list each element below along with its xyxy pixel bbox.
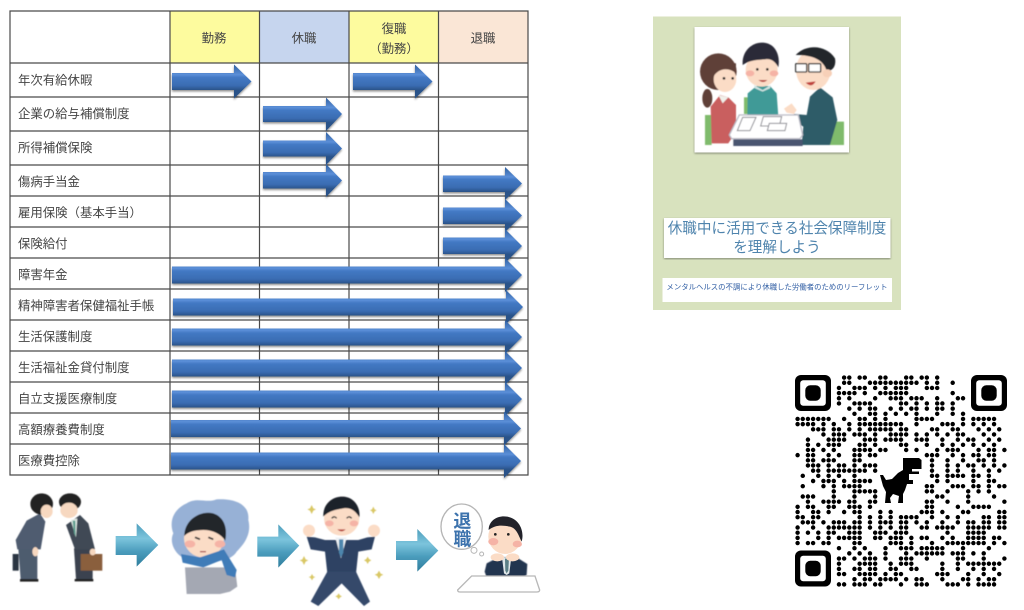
row labels: 傷病手当金 <box>18 174 80 189</box>
table header: status columns: 退職 <box>471 32 496 46</box>
icon: dinosaur at QR centre <box>880 458 922 503</box>
thought bubble: 退 <box>453 511 471 531</box>
panel: leaflet cover <box>653 16 901 310</box>
row labels: 所得補償保険 <box>18 140 93 155</box>
leaflet title <box>664 218 890 258</box>
table header: status columns: （勤務） <box>369 42 419 56</box>
leaflet subtitle <box>662 278 892 302</box>
row labels: 医療費控除 <box>18 453 81 468</box>
table header: status columns: 勤務 <box>202 32 227 46</box>
row labels: 雇用保険（基本手当） <box>18 206 142 220</box>
table header: status columns: 復職 <box>382 21 407 36</box>
illustration: depressed person <box>172 499 249 594</box>
table header: status columns: 休職 <box>292 32 317 46</box>
QR finder patterns <box>795 375 1007 586</box>
arrow: step 3 to 4 <box>396 529 438 572</box>
illustration: consultation at table <box>694 27 849 152</box>
row labels: 精神障害者保健福祉手帳 <box>18 298 155 313</box>
illustration: energetic person with sparkles <box>300 497 383 606</box>
QR code <box>795 375 1007 586</box>
row labels: 年次有給休暇 <box>18 74 92 88</box>
leaflet title: を理解しよう <box>733 239 821 256</box>
table header: status columns <box>170 11 528 63</box>
row labels: 生活福祉金貸付制度 <box>18 360 130 375</box>
illustration: person thinking of resignation <box>441 504 540 592</box>
leaflet title: 休職中に活用できる社会保障制度 <box>668 220 887 237</box>
row labels <box>18 74 155 468</box>
row labels: 保険給付 <box>18 237 68 251</box>
row labels: 生活保護制度 <box>18 329 92 344</box>
row labels: 障害年金 <box>18 267 68 282</box>
arrows: coverage periods <box>171 64 523 478</box>
row labels: 企業の給与補償制度 <box>18 106 130 121</box>
panel: benefits timeline table <box>10 11 528 478</box>
illustration: bowing businesspeople <box>13 493 102 582</box>
thought bubble <box>441 504 484 556</box>
QR data dots <box>798 378 1004 584</box>
row labels: 自立支援医療制度 <box>18 391 117 406</box>
thought bubble: 職 <box>453 529 471 549</box>
row labels: 高額療養費制度 <box>18 422 105 437</box>
leaflet subtitle: メンタルヘルスの不調により休職した労働者のためのリーフレット <box>666 282 888 292</box>
arrow: step 1 to 2 <box>116 523 158 567</box>
arrow: step 2 to 3 <box>257 524 299 568</box>
